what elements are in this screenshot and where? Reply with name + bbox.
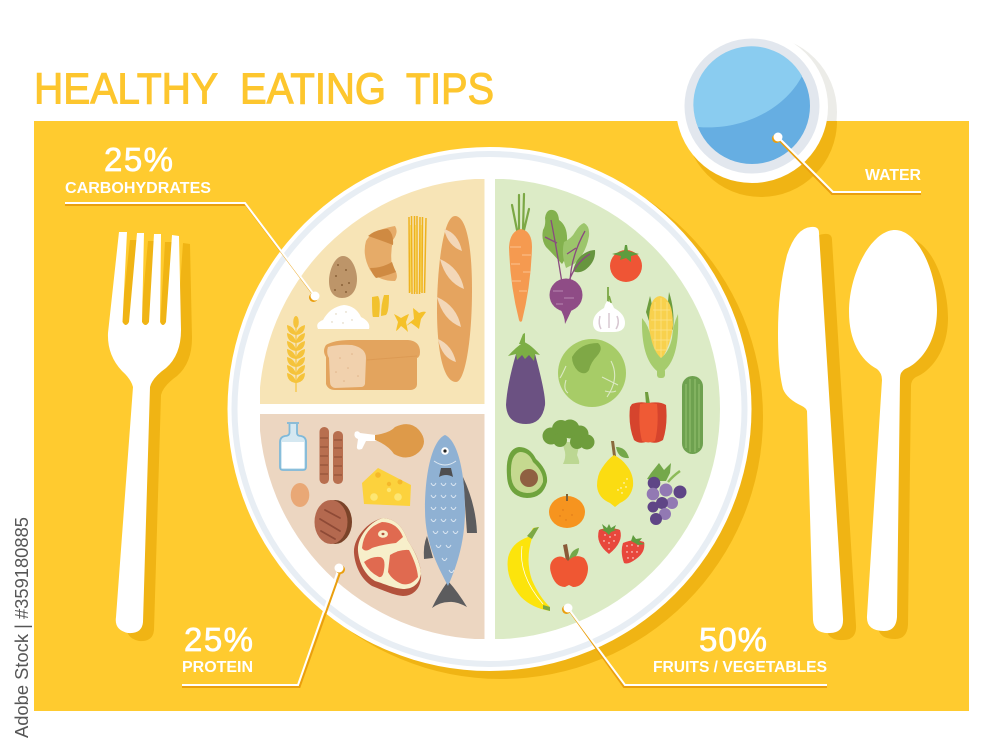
icon: carrot	[509, 194, 532, 322]
icon: milk bottle	[280, 423, 306, 470]
callout: protein: 25%	[184, 621, 253, 658]
icon: cheese	[362, 468, 411, 506]
image credit: Adobe Stock | #359180885	[12, 517, 32, 738]
icon: potato	[329, 256, 357, 298]
callout: fruits and vegetables: FRUITS / VEGETABLES	[653, 659, 827, 676]
icon: chicken leg	[354, 424, 424, 458]
icon: beet	[542, 210, 595, 324]
icon: tomato	[610, 245, 642, 282]
callout: water	[772, 132, 921, 194]
icon: grapes	[647, 463, 686, 525]
callout: carbohydrates	[65, 141, 320, 302]
icon: banana	[508, 527, 550, 611]
icon: baguette	[437, 216, 472, 382]
icon: strawberries	[598, 524, 645, 564]
callout: water: WATER	[865, 167, 921, 184]
icon: cabbage	[558, 339, 626, 407]
callout: carbohydrates: 25%	[104, 141, 173, 178]
icon: croissant	[365, 226, 397, 281]
icon: fork	[108, 232, 192, 641]
icon: eggplant	[506, 333, 545, 424]
panel: protein section	[260, 414, 484, 639]
icon: orange	[549, 494, 585, 528]
icon: farfalle	[394, 308, 426, 332]
icon: lemon	[597, 441, 633, 507]
title: EATING	[240, 66, 386, 114]
panel: table mat	[34, 121, 969, 711]
icon: garlic	[593, 287, 625, 332]
icon: water glass	[676, 31, 837, 197]
title	[34, 66, 494, 114]
icon: steak	[354, 518, 421, 596]
panel: fruits and vegetables section	[495, 179, 720, 639]
callout: fruits and vegetables	[562, 604, 827, 687]
icon: egg	[291, 483, 309, 507]
icon: penne	[372, 295, 389, 317]
icon: fish	[424, 435, 477, 608]
panel: plate	[228, 147, 763, 679]
icon: spaghetti	[409, 216, 426, 294]
callout: fruits and vegetables: 50%	[699, 621, 767, 658]
callout: protein: PROTEIN	[182, 659, 253, 676]
icon: wheat	[287, 316, 305, 392]
callout: protein	[182, 564, 345, 687]
icon: sausages	[320, 427, 343, 484]
icon: cucumber	[682, 376, 703, 454]
icon: flour	[317, 305, 369, 329]
icon: knife	[778, 227, 856, 640]
icon: apple	[550, 544, 588, 587]
icon: spoon	[849, 230, 948, 639]
panel: carbohydrates section	[260, 179, 484, 404]
callout: carbohydrates: CARBOHYDRATES	[65, 180, 211, 197]
icon: corn	[642, 292, 678, 378]
icon: bell pepper	[630, 392, 667, 443]
title: TIPS	[406, 66, 494, 114]
icon: broccoli	[542, 420, 594, 464]
icon: bread loaf	[324, 340, 420, 390]
title: HEALTHY	[34, 66, 218, 114]
icon: avocado	[507, 447, 547, 498]
icon: burger patty	[314, 500, 352, 544]
